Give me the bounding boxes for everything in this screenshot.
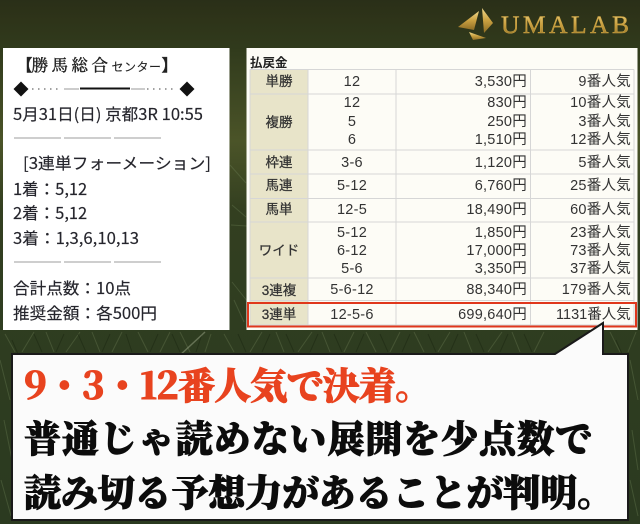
- divider: [14, 261, 161, 263]
- payouts: 88,340円: [466, 282, 527, 298]
- callout: result summary: [12, 323, 628, 520]
- horse numbers: 12: [344, 74, 360, 90]
- payouts: 1,120円: [475, 155, 527, 171]
- popularity ranks: 23番人気: [570, 224, 631, 241]
- popularity ranks: 60番人気: [570, 201, 631, 218]
- panel: betting tip: [3, 48, 230, 330]
- popularity ranks: 25番人気: [570, 177, 631, 194]
- popularity ranks: 3番人気: [578, 113, 631, 130]
- payouts: 18,490円: [466, 202, 527, 218]
- payouts: 3,530円: [475, 74, 527, 90]
- row labels: 馬単: [266, 202, 292, 217]
- horse numbers: 6-12: [337, 243, 367, 259]
- popularity ranks: 10番人気: [570, 94, 631, 111]
- horse numbers: [330, 74, 374, 323]
- icon: gold diamond mark: [458, 8, 493, 40]
- divider: [14, 137, 161, 139]
- horse numbers: 6: [348, 132, 356, 148]
- row labels: [259, 74, 299, 322]
- row labels: ワイド: [259, 243, 299, 258]
- table grid: [250, 70, 634, 325]
- payouts: 699,640円: [458, 307, 527, 323]
- decorative diamond divider: [14, 82, 194, 96]
- popularity ranks: 179番人気: [562, 281, 631, 298]
- popularity ranks: 1131番人気: [556, 306, 631, 323]
- payouts: 250円: [487, 114, 527, 130]
- row labels: 単勝: [266, 74, 293, 89]
- callout line two: 普通じゃ読めない展開を少点数で: [24, 409, 592, 463]
- payouts: 1,510円: [475, 132, 527, 148]
- payouts: 3,350円: [475, 261, 527, 277]
- row labels: 3連複: [262, 282, 297, 298]
- callout line three: 読み切る予想力があることが判明。: [24, 463, 614, 517]
- logo wordmark: UMALAB: [501, 10, 629, 39]
- horse numbers: 3-6: [341, 155, 363, 171]
- heading: tip source: 【勝馬総合センター】: [16, 52, 178, 76]
- payouts: 6,760円: [475, 178, 527, 194]
- horse numbers: 12-5-6: [330, 307, 374, 323]
- table title: 払戻金: [250, 52, 288, 71]
- horse numbers: 5-12: [337, 225, 367, 241]
- popularity ranks: 9番人気: [578, 73, 631, 90]
- horse numbers: 12-5: [337, 202, 367, 218]
- payouts: 1,850円: [475, 225, 527, 241]
- speech bubble: [12, 323, 628, 520]
- race date and venue: 5月31日(日) 京都3R 10:55: [13, 101, 203, 125]
- row labels: 3連単: [262, 307, 296, 322]
- total points: 合計点数：10点: [13, 275, 131, 299]
- popularity ranks: 73番人気: [570, 242, 631, 259]
- horse numbers: 5-6: [341, 261, 363, 277]
- label column: [250, 70, 308, 325]
- popularity ranks: 37番人気: [570, 260, 631, 277]
- payouts: [458, 74, 527, 323]
- horse numbers: 5-6-12: [330, 282, 374, 298]
- row labels: 枠連: [266, 155, 292, 170]
- horse numbers: 12: [344, 95, 360, 111]
- bet type heading: [3連単フォーメーション]: [23, 150, 211, 174]
- popularity ranks: 5番人気: [578, 154, 631, 171]
- worn highlight blade: [178, 332, 205, 357]
- popularity ranks: [556, 73, 631, 323]
- payouts: 830円: [487, 95, 527, 111]
- logo: UMALAB: [458, 8, 629, 40]
- second place numbers: 2着：5,12: [13, 200, 87, 224]
- row labels: 馬連: [266, 178, 292, 193]
- recommended stake: 推奨金額：各500円: [13, 300, 157, 324]
- row labels: 複勝: [266, 114, 293, 130]
- panel: payout table: [246, 48, 638, 330]
- callout headline: 9・3・12番人気で決着。: [24, 356, 432, 410]
- payouts: 17,000円: [466, 243, 527, 259]
- first place numbers: 1着：5,12: [13, 176, 87, 200]
- popularity ranks: 12番人気: [570, 131, 631, 148]
- third place numbers: 3着：1,3,6,10,13: [13, 225, 139, 249]
- horse numbers: 5-12: [337, 178, 367, 194]
- horse numbers: 5: [348, 114, 356, 130]
- highlight: trifecta row: [248, 303, 636, 326]
